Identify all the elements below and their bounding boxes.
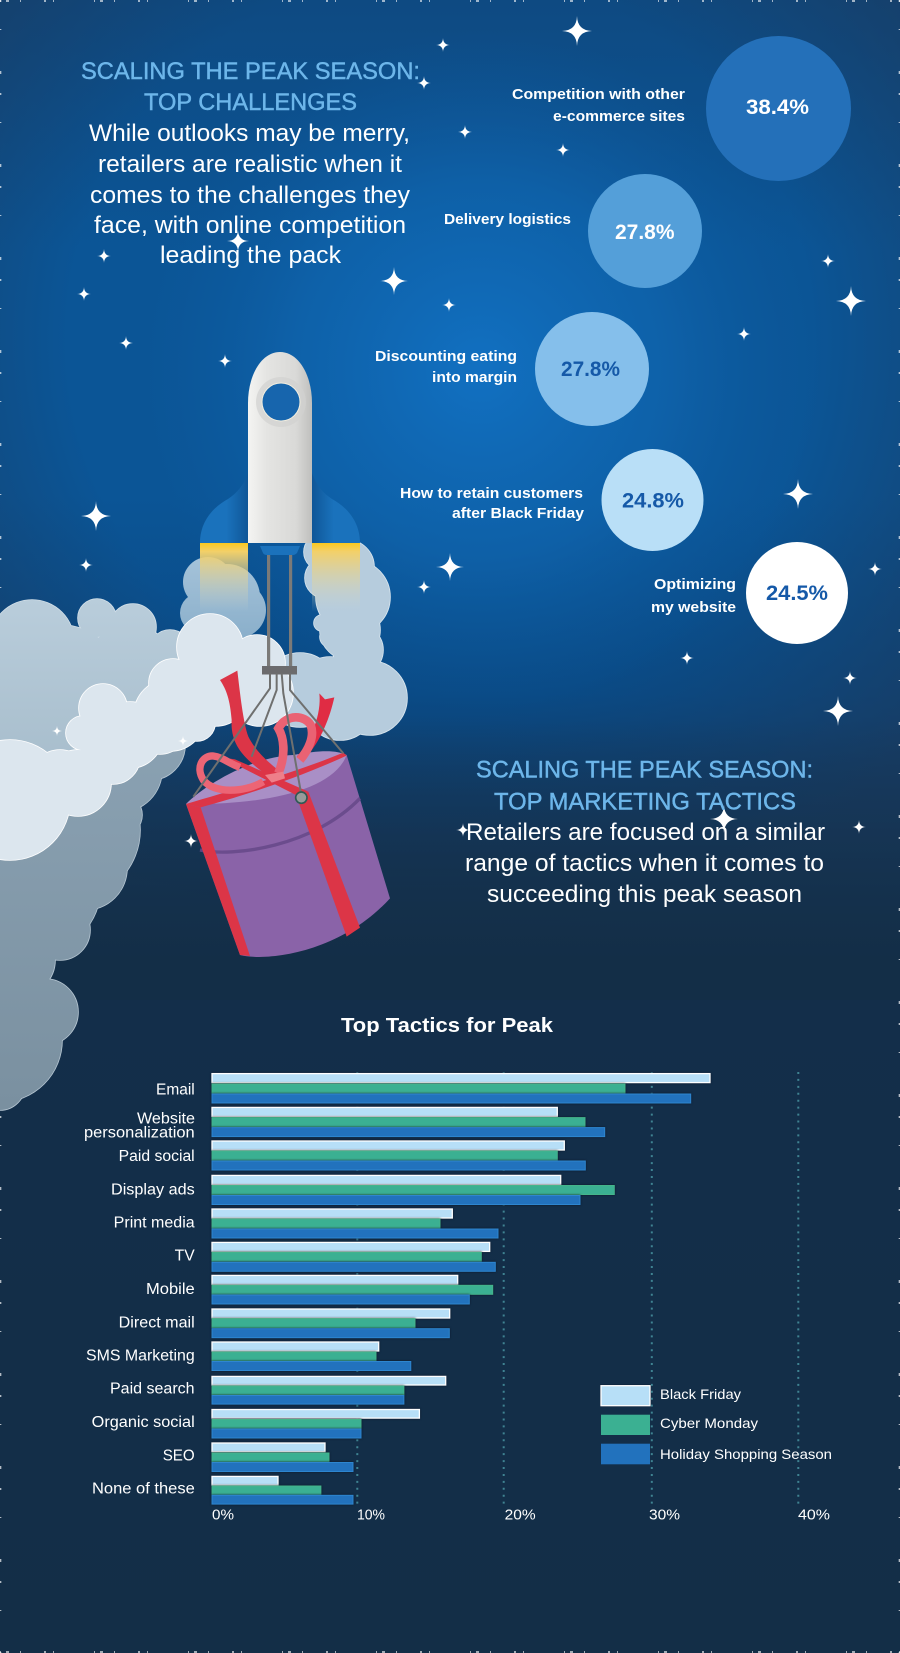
row: TV: [175, 1242, 495, 1271]
challenge: retain customers: How to retain customers: [400, 485, 583, 502]
suspension wires: [193, 673, 343, 797]
row: Website personalization: [84, 1107, 605, 1142]
flames: [200, 543, 360, 613]
body: [248, 352, 312, 543]
row: Paid social: Paid social: [119, 1148, 195, 1165]
x axis labels: 30%: [649, 1508, 680, 1524]
cloud: right column: [263, 534, 407, 740]
bar chart: top tactics for peak: [84, 1072, 832, 1524]
cloud: behind left flame: [180, 557, 266, 638]
heading: top marketing tactics: [476, 756, 813, 816]
intro text: challenges: retailers are realistic when it: [98, 151, 402, 178]
pin: [296, 792, 307, 803]
row: Display ads: [111, 1175, 614, 1204]
row: SEO: [163, 1443, 353, 1472]
box top: [186, 751, 347, 804]
bow tails: [200, 671, 334, 790]
challenge: retain customers: 24.8%: [622, 490, 684, 512]
heading: top challenges: SCALING THE PEAK SEASON:: [81, 58, 420, 85]
challenge: discounting: 27.8%: [561, 358, 620, 381]
heading: top challenges: TOP CHALLENGES: [144, 89, 357, 116]
row: None of these: None of these: [92, 1480, 195, 1498]
row: Direct mail: Direct mail: [119, 1314, 195, 1332]
legend: Cyber Monday: [660, 1415, 758, 1431]
stars: [77, 16, 882, 848]
intro text: challenges: leading the pack: [160, 242, 342, 269]
heading: top marketing tactics: TOP MARKETING TACTICS: [494, 788, 796, 816]
intro text: tactics: succeeding this peak season: [487, 881, 802, 908]
cloud: light front: [0, 614, 293, 860]
row: Print media: Print media: [114, 1214, 195, 1232]
cloud: dark back: [0, 710, 185, 1110]
intro text: challenges: [89, 120, 410, 269]
x axis labels: 40%: [798, 1508, 830, 1524]
heading: top marketing tactics: SCALING THE PEAK SEASON:: [476, 756, 813, 784]
row: SMS Marketing: [86, 1342, 411, 1370]
challenge: retain customers: [400, 449, 704, 551]
gift: [186, 671, 390, 957]
row: Organic social: Organic social: [92, 1414, 195, 1431]
intro text: challenges: comes to the challenges they: [90, 182, 410, 209]
row: Direct mail: [119, 1309, 450, 1338]
challenge: competition: 38.4%: [746, 96, 809, 119]
nozzle: [260, 546, 300, 555]
x axis labels: 0%: [212, 1508, 234, 1524]
intro text: tactics: range of tactics when it comes to: [465, 850, 824, 877]
fins: [200, 473, 360, 543]
smoke clouds: [0, 534, 407, 1110]
row: Organic social: [92, 1410, 419, 1438]
row: Website personalization: Website: [137, 1110, 195, 1128]
x axis labels: 20%: [505, 1508, 536, 1524]
box body: [186, 755, 390, 957]
intro text: tactics: Retailers are focused on a similar: [466, 819, 825, 846]
row: Email: [156, 1074, 710, 1103]
ribbon bands: [186, 753, 360, 956]
challenge: optimizing website: [651, 542, 848, 644]
rods: [262, 555, 297, 674]
legend: Black Friday: [660, 1386, 741, 1402]
intro text: challenges: While outlooks may be merry,: [89, 120, 410, 147]
challenge: discounting: [375, 312, 649, 426]
porthole: [256, 377, 306, 427]
row: Print media: [114, 1209, 498, 1238]
rocket: [200, 352, 360, 674]
intro text: tactics: [465, 819, 825, 908]
challenge: discounting: into margin: [432, 369, 517, 386]
box lid seam: [200, 798, 360, 852]
challenge: competition: Competition with other: [512, 86, 685, 103]
challenge: optimizing website: 24.5%: [766, 582, 828, 605]
x axis labels: 10%: [357, 1508, 385, 1524]
row: Website personalization: personalization: [84, 1124, 195, 1142]
chart title: Top Tactics for Peak: [341, 1014, 554, 1037]
challenge: delivery logistics: Delivery logistics: [444, 211, 571, 228]
row: Mobile: Mobile: [146, 1281, 195, 1298]
intro text: challenges: face, with online competition: [94, 212, 406, 239]
challenge: optimizing website: my website: [651, 599, 736, 616]
challenge: delivery logistics: [444, 174, 702, 288]
x axis labels: [212, 1508, 830, 1524]
row: TV: TV: [175, 1248, 195, 1264]
challenge: discounting: Discounting eating: [375, 348, 517, 365]
challenge: competition: e-commerce sites: [553, 108, 685, 125]
row: None of these: [92, 1476, 353, 1504]
row: Email: Email: [156, 1082, 195, 1098]
challenge: optimizing website: Optimizing: [654, 576, 736, 593]
row: SEO: SEO: [163, 1448, 195, 1464]
row: Mobile: [146, 1275, 493, 1304]
legend: [600, 1385, 832, 1464]
challenge: delivery logistics: 27.8%: [615, 221, 675, 244]
row: SMS Marketing: SMS Marketing: [86, 1348, 195, 1364]
legend: Holiday Shopping Season: [660, 1446, 832, 1462]
row: Paid search: [110, 1376, 446, 1404]
cloud: middle: [0, 599, 195, 755]
row: Paid social: [119, 1141, 585, 1170]
row: Paid search: Paid search: [110, 1380, 195, 1398]
challenge: competition: [512, 36, 851, 181]
heading: top challenges: [81, 58, 420, 116]
challenge: retain customers: after Black Friday: [452, 505, 585, 522]
row: Display ads: Display ads: [111, 1182, 195, 1198]
